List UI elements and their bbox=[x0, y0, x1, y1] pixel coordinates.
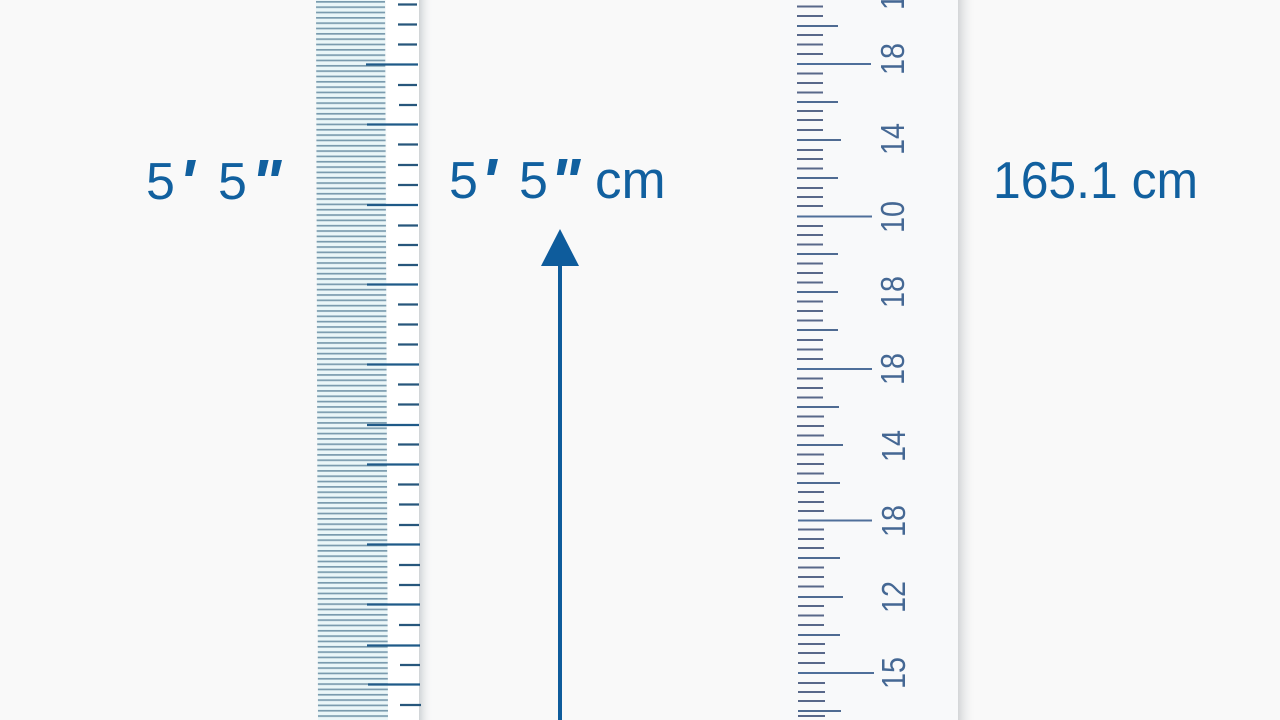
left ruler edge shadow bbox=[419, 0, 433, 720]
center height label: cm bbox=[595, 151, 666, 210]
left height label: 5 bbox=[146, 153, 175, 211]
center height label: 5 bbox=[519, 152, 548, 210]
right ruler numbers: 15 bbox=[875, 657, 912, 689]
right ruler bbox=[780, 0, 976, 720]
right ruler numbers: 18 bbox=[874, 353, 911, 385]
left ruler body bbox=[386, 0, 421, 720]
left height label: " bbox=[251, 146, 282, 218]
left height label bbox=[146, 146, 282, 218]
left height label: ' bbox=[179, 146, 196, 218]
left height label: 5 bbox=[218, 153, 247, 211]
right ruler edge shadow bbox=[958, 0, 976, 720]
center height label: 5 bbox=[449, 152, 478, 210]
center height label: ' bbox=[481, 145, 498, 217]
right ruler numbers: 18 bbox=[875, 505, 912, 537]
right ruler medium ticks bbox=[797, 26, 843, 711]
right ruler long ticks bbox=[797, 64, 874, 673]
right ruler numbers: 14 bbox=[874, 123, 911, 155]
right ruler numbers: 12 bbox=[875, 581, 912, 613]
right ruler numbers: 18 bbox=[874, 276, 911, 308]
right ruler numbers: 10 bbox=[874, 201, 911, 233]
right ruler short ticks bbox=[797, 6, 825, 716]
upward arrow bbox=[541, 229, 579, 720]
right height label: 165.1 cm bbox=[993, 152, 1198, 210]
left ruler fine gray graduations bbox=[316, 0, 388, 720]
left ruler short ticks bbox=[398, 4, 421, 705]
right ruler numbers bbox=[874, 0, 912, 689]
right ruler numbers: 18 bbox=[874, 43, 911, 75]
right ruler body bbox=[780, 0, 958, 720]
center height label bbox=[449, 145, 666, 217]
right ruler numbers: 14 bbox=[875, 430, 912, 462]
center height label: " bbox=[550, 145, 581, 217]
left ruler long ticks bbox=[366, 64, 420, 684]
left ruler bbox=[316, 0, 433, 720]
